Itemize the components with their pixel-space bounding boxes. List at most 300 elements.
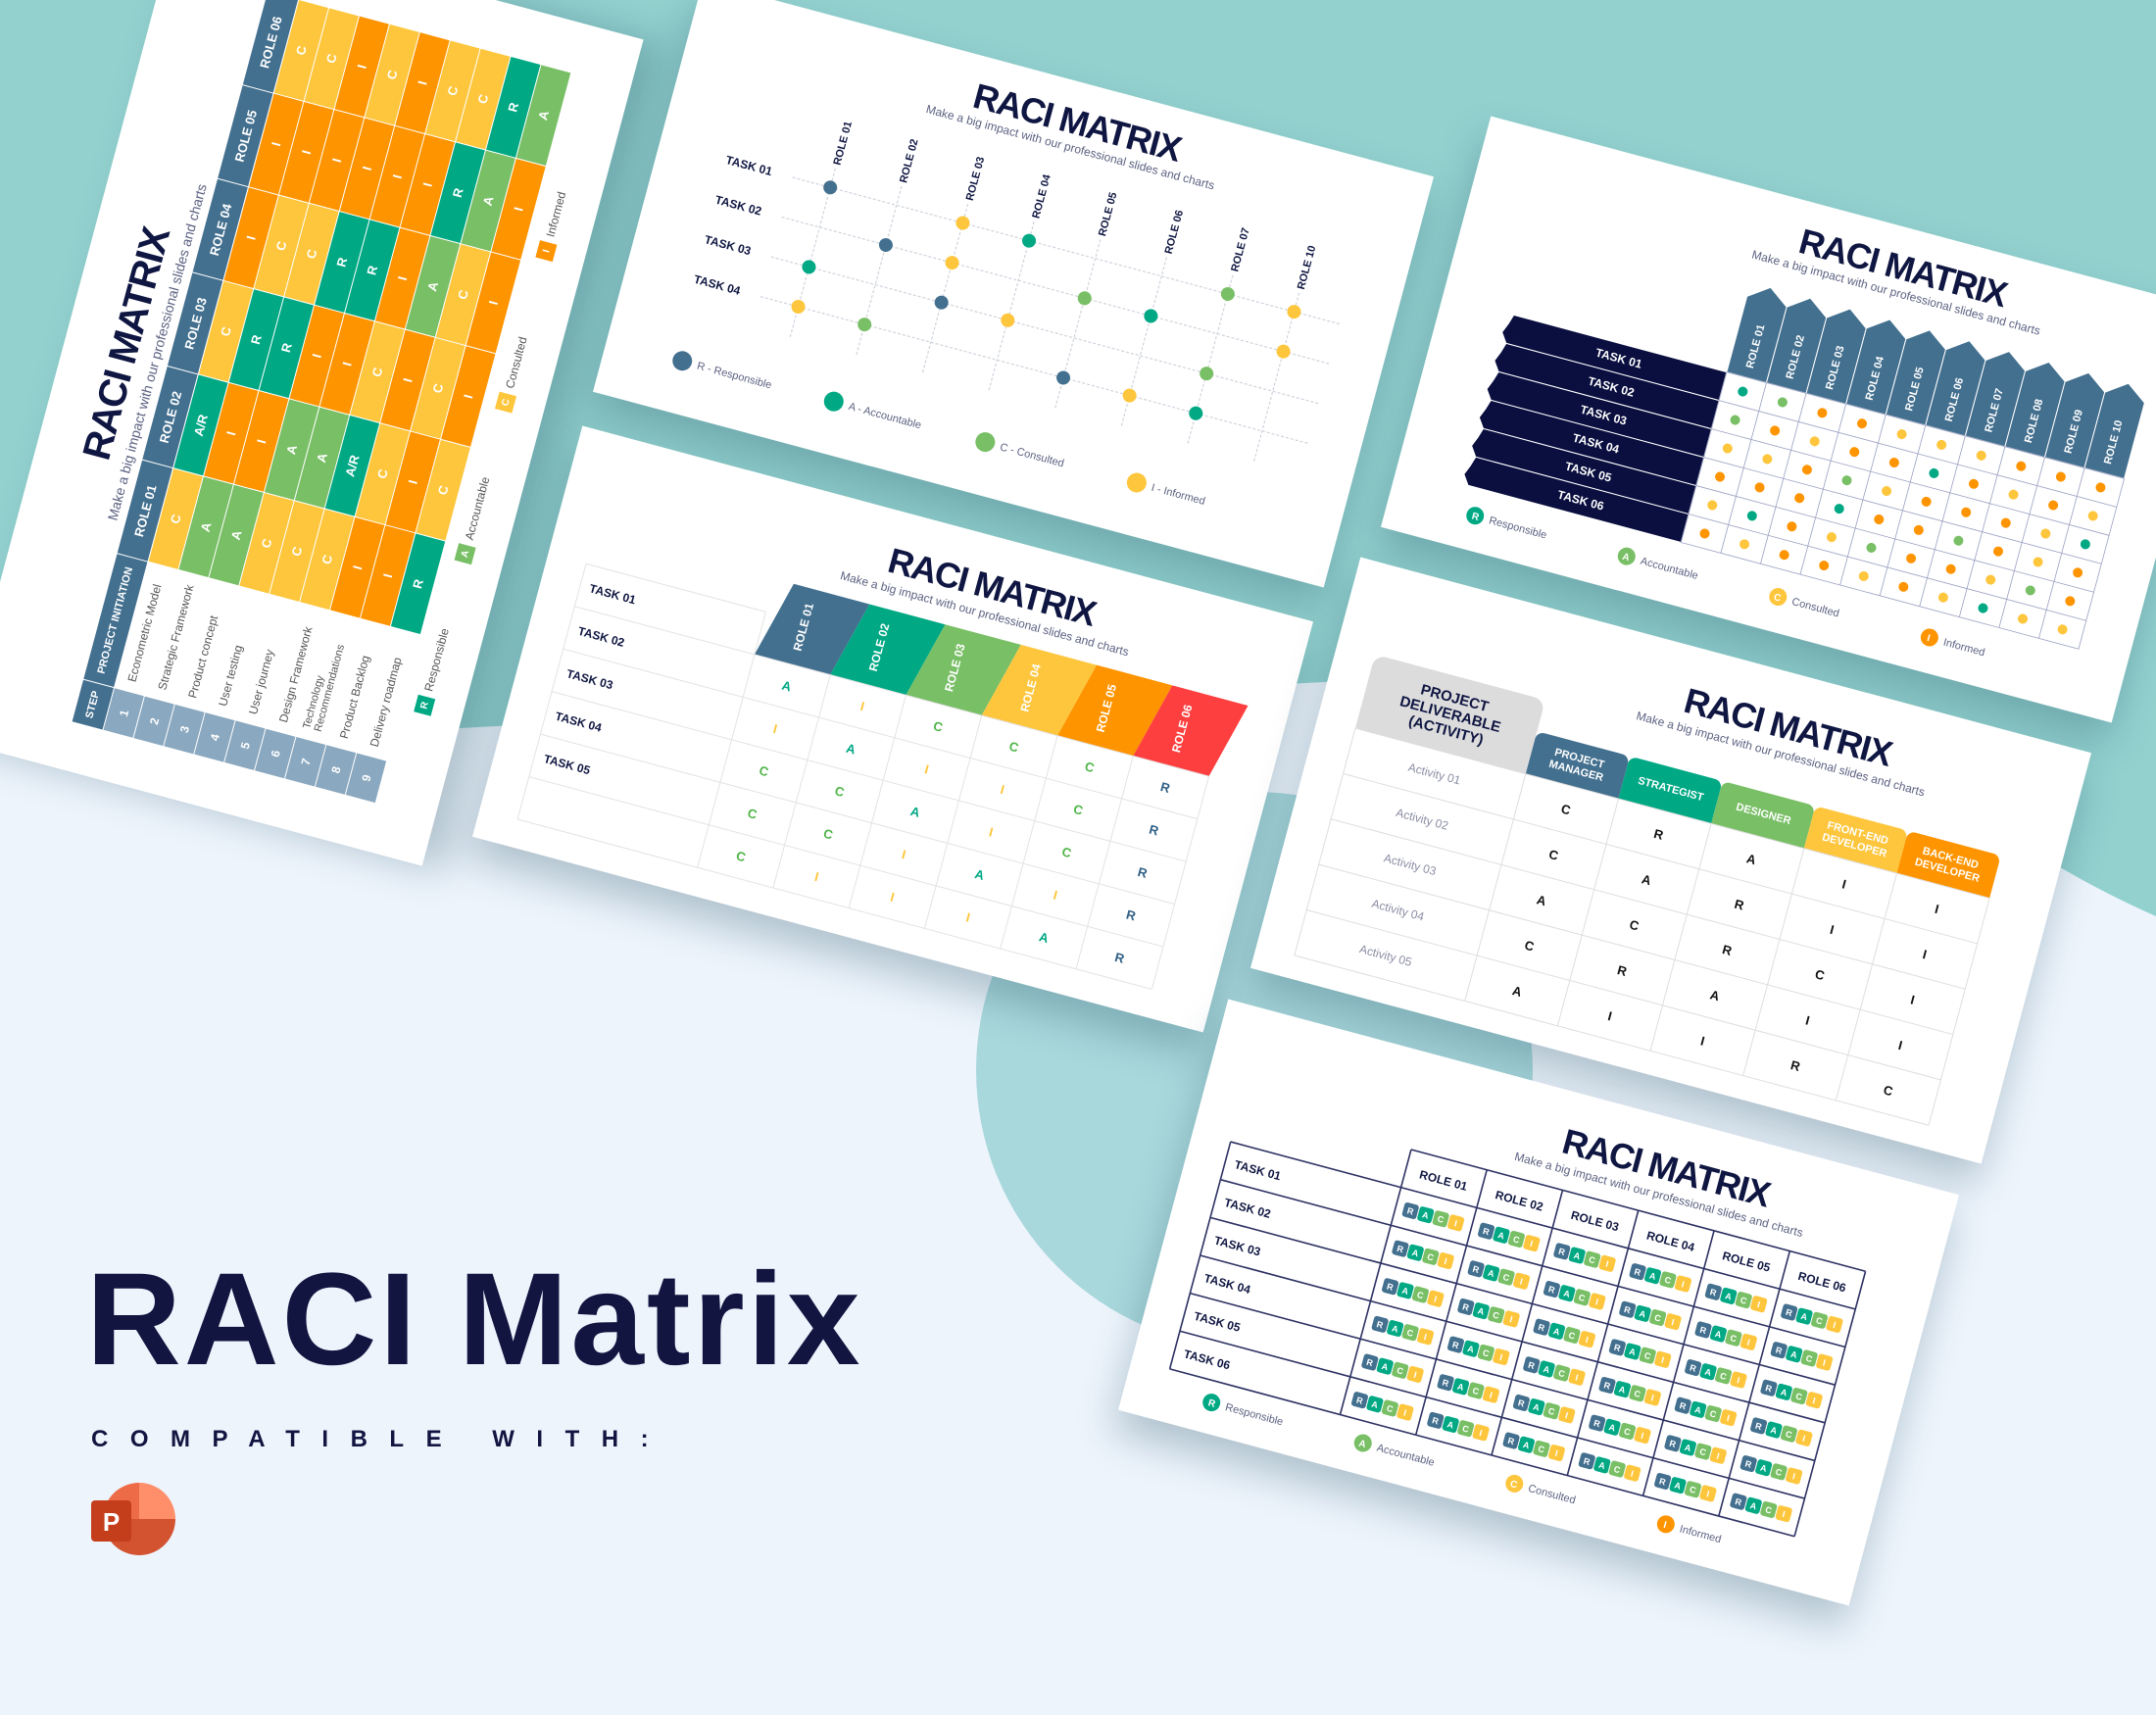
slide 6 title: RACI MATRIX (1558, 1121, 1774, 1214)
slide 6 table: C (1396, 1365, 1405, 1377)
slide 5 role headers: DEVELOPER (1821, 831, 1888, 859)
slide 6 table: R (1754, 1421, 1763, 1432)
slide 6 table: C (1698, 1446, 1708, 1457)
slide 2 dot chart: ROLE 04 (1030, 172, 1054, 220)
slide 6 table: C (1764, 1504, 1774, 1516)
slide 1 colored cells: R (450, 186, 466, 199)
slide 6 table: I (1585, 1335, 1590, 1345)
slide 6 table: R (1451, 1340, 1460, 1350)
slide 6 table: C (1386, 1403, 1395, 1414)
slide 6 table: A (1357, 1439, 1367, 1450)
slide 6 table: C (1502, 1272, 1511, 1283)
slide 5 grid: C (1559, 802, 1573, 818)
slide 5 grid: C (1628, 917, 1642, 934)
slide 1 colored cells: I (339, 361, 355, 368)
slide 6 table: R (1461, 1301, 1471, 1313)
slide 1 colored cells: I (406, 478, 420, 486)
slide 1 colored cells: A/R (342, 453, 363, 478)
slide 1 colored cells: R (248, 332, 265, 346)
slide 1 rows: 7 (298, 757, 313, 766)
slide 6 table: R (1355, 1395, 1364, 1406)
slide 6 table: C (1578, 1293, 1587, 1303)
slide 6 table: R (1482, 1226, 1491, 1237)
compatible with label: COMPATIBLE WITH: (91, 1426, 670, 1452)
slide 3 matrix: ROLE 02 (1785, 334, 1807, 380)
slide 6 table: R (1547, 1284, 1556, 1296)
slide 2 title: RACI MATRIX (969, 75, 1185, 170)
slide 1 table header: ROLE 02 (156, 389, 184, 445)
icon: PowerPoint: P (103, 1507, 120, 1537)
slide 4 table: R (1159, 779, 1172, 796)
slide 6 table: R (1775, 1345, 1784, 1356)
slide 1 colored cells: R (410, 577, 426, 590)
slide 6 table: A (1370, 1399, 1380, 1410)
slide 1 rows: Technology (301, 674, 326, 730)
slide 5: project deliverable table (1250, 557, 2091, 1164)
slide 5 grid: I (1896, 1038, 1904, 1053)
slide 4 table: I (999, 782, 1006, 797)
slide 6 table: A (1496, 1230, 1506, 1242)
slide 6 table: C (1663, 1275, 1673, 1286)
slide 4 table: R (1125, 906, 1138, 924)
slide 3 matrix: ROLE 04 (1864, 355, 1886, 402)
slide 3 matrix: TASK 04 (1571, 431, 1621, 457)
slide 5 grid: R (1616, 962, 1629, 979)
slide 6 table: A (1381, 1361, 1390, 1372)
slide 6 table: ROLE 05 (1721, 1249, 1772, 1275)
slide 6 table: A (1704, 1367, 1713, 1378)
slide 1 colored cells: I (390, 172, 405, 180)
slide 5 gray header: PROJECT (1419, 681, 1491, 715)
slide 5 gray header: (ACTIVITY) (1407, 712, 1486, 748)
slide 6 table: I (1489, 1390, 1494, 1400)
slide 6 table: I (1630, 1469, 1635, 1479)
slide 6 table: A (1673, 1480, 1683, 1492)
slide 1 colored cells: A (228, 528, 245, 542)
slide 5 grid: I (1699, 1033, 1706, 1049)
slide 6 table: A (1648, 1271, 1657, 1282)
slide 5 role headers: DEVELOPER (1914, 856, 1981, 884)
slide 6 table: I (1726, 1413, 1731, 1423)
slide 6 table: A (1639, 1308, 1647, 1320)
slide 6 table: C (1492, 1310, 1501, 1321)
slide 6 table: R (1709, 1287, 1718, 1298)
slide 6 table: I (1681, 1279, 1686, 1290)
slide 2 dot chart: C - Consulted (999, 441, 1065, 469)
slide 6 table: I (1498, 1352, 1503, 1362)
slide 1 colored cells: I (511, 206, 526, 213)
slide 6 table: A (1749, 1500, 1758, 1512)
slide 6 table: ROLE 01 (1418, 1167, 1469, 1194)
slide 5 role headers: BACK-END (1922, 845, 1980, 871)
slide 5 grid: Activity 01 (1406, 760, 1462, 787)
slide 6 table: R (1764, 1383, 1774, 1395)
slide 4 table: C (1060, 844, 1074, 860)
slide 4 table: C (1072, 802, 1085, 818)
slide 2 dot chart: TASK 04 (693, 272, 742, 298)
slide 1 colored cells: C (374, 467, 391, 480)
slide 1 legend: Consulted (503, 335, 530, 390)
slide 6 table: C (1623, 1426, 1632, 1438)
slide 6 table: A (1477, 1305, 1486, 1317)
slide 1 colored cells: A/R (191, 413, 211, 438)
slide 2 dot chart: A - Accountable (847, 401, 922, 431)
slide 6 table: R (1386, 1282, 1395, 1293)
slide 1 colored cells: C (455, 288, 471, 301)
slide 5 grid: A (1535, 892, 1548, 908)
slide 6 table: A (1789, 1349, 1799, 1360)
slide 1 colored cells: A (424, 279, 441, 293)
slide 5 grid: I (1829, 922, 1836, 937)
slide 4 table: TASK 01 (588, 581, 638, 607)
slide 1 colored cells: C (293, 43, 310, 57)
slide 6 table: I (1650, 1393, 1655, 1403)
slide 6 table: A (1456, 1382, 1465, 1393)
slide 6 table: R (1365, 1357, 1375, 1368)
slide 1 colored cells: I (461, 393, 475, 400)
slide 1 rows: 6 (268, 749, 282, 759)
slide 6 table: R (1785, 1307, 1793, 1318)
slide 2 dot chart: TASK 01 (724, 153, 774, 178)
slide 6 table: C (1775, 1467, 1784, 1478)
slide 4 table: A (1038, 929, 1051, 946)
slide 6 table: A (1466, 1344, 1476, 1355)
slide 5 grid: Activity 04 (1370, 897, 1426, 924)
slide 6 table: I (1453, 1218, 1458, 1229)
slide 4 table: C (833, 783, 847, 800)
slide 6 table: I (1444, 1256, 1448, 1266)
slide 6 table: C (1461, 1423, 1470, 1435)
slide 6 table: A (1608, 1422, 1617, 1434)
slide 1 colored cells: C (384, 68, 401, 81)
slide 5 grid: I (1921, 947, 1929, 962)
slide 6 table: C (1437, 1214, 1446, 1225)
slide 3 matrix: ROLE 07 (1983, 387, 2006, 433)
slide 1 colored cells: I (486, 299, 501, 307)
slide 6 table: I (1574, 1373, 1579, 1383)
slide 1 colored cells: A (198, 520, 215, 533)
slide 5 grid: I (1909, 992, 1916, 1007)
slide 1 colored cells: A (535, 109, 552, 122)
slide 3 matrix: ROLE 10 (2102, 419, 2126, 466)
slide 6 table (1168, 1141, 1866, 1545)
slide 5 grid: Activity 03 (1383, 851, 1438, 878)
slide 5 grid: R (1733, 897, 1746, 913)
slide 6 table: I (1705, 1489, 1710, 1499)
slide 5 gray header (1355, 655, 1545, 774)
slide 3 matrix: TASK 02 (1587, 374, 1637, 400)
slide 6 table: R (1658, 1476, 1667, 1488)
slide 6 table: A (1800, 1311, 1809, 1322)
slide 4 table: ROLE 04 (1017, 662, 1044, 713)
slide 1 legend (414, 190, 568, 716)
slide 3 matrix: ROLE 05 (1903, 366, 1927, 413)
slide 4 table: A (780, 678, 794, 695)
slide 6 table: I (1605, 1259, 1610, 1269)
slide 6 table: R (1689, 1362, 1697, 1374)
slide 1 rows: Product Backlog (337, 654, 372, 740)
slide 6 table: A (1487, 1268, 1495, 1279)
icon: PowerPoint (91, 1483, 175, 1555)
slide 6 table: I (1801, 1434, 1806, 1444)
slide 6 table: Consulted (1527, 1483, 1577, 1506)
slide 2 dot chart: ROLE 02 (898, 138, 921, 184)
slide 1 table header: ROLE 04 (206, 202, 234, 257)
slide 1 table header: ROLE 03 (181, 296, 209, 351)
slide 4 table: C (746, 806, 760, 822)
slide 1 legend: Accountable (463, 475, 492, 542)
slide 6 table: C (1785, 1429, 1793, 1440)
slide 6 table: A (1618, 1384, 1627, 1396)
slide 6 table: A (1421, 1209, 1430, 1221)
slide 5 grid: A (1745, 851, 1758, 867)
slide 1 colored cells: I (223, 429, 238, 437)
slide 1 colored cells: C (273, 239, 290, 252)
slide 6 table: C (1416, 1290, 1425, 1300)
slide 4 table: ROLE 02 (866, 621, 892, 673)
slide 4 table: C (735, 848, 748, 864)
slide 6 table: A (1780, 1387, 1788, 1398)
slide 1 colored cells: I (415, 79, 430, 86)
slide 6 table: I (1529, 1239, 1534, 1249)
slide 6 table: R (1744, 1458, 1753, 1470)
slide 1 rows (104, 583, 405, 804)
slide 3 matrix: C (1773, 592, 1782, 605)
slide 4 table: ROLE 06 (1169, 703, 1196, 754)
slide 4 table: I (813, 869, 820, 884)
slide 1 rows: Recommendations (313, 643, 347, 733)
slide 4 table: R (1136, 864, 1150, 881)
slide 1 rows: 5 (237, 741, 252, 751)
slide 6 table: I (1640, 1431, 1644, 1441)
slide 1 colored cells: I (243, 234, 259, 241)
slide 6 table: I (1670, 1317, 1675, 1327)
slide 1 colored cells: R (333, 255, 350, 269)
slide 2 dot chart: ROLE 07 (1229, 226, 1252, 273)
slide 1 legend: I (541, 248, 552, 254)
slide 1 colored cells: C (429, 381, 446, 395)
slide 1 colored cells: I (269, 140, 283, 148)
slide 1 colored cells: R (505, 100, 521, 114)
slide 6 table: ROLE 03 (1569, 1208, 1621, 1234)
slide 3 matrix: TASK 03 (1579, 403, 1629, 428)
slide 6 table: C (1805, 1353, 1814, 1364)
slide 1 rows: User testing (216, 644, 245, 708)
slide 5 grid: C (1523, 938, 1537, 955)
slide 6 table: C (1794, 1391, 1804, 1402)
slide 1 colored cells: I (299, 149, 314, 156)
slide 1 colored cells: I (254, 438, 269, 445)
slide 4 table: C (822, 826, 835, 843)
slide 1 colored cells: I (329, 157, 344, 164)
slide 4: colored role headers with letters (472, 425, 1313, 1033)
slide 5 grid: C (1813, 966, 1827, 983)
slide 3 matrix: ROLE 01 (1744, 323, 1767, 369)
slide 6 table: C (1613, 1464, 1622, 1475)
slide 1 table header: ROLE 06 (257, 15, 284, 70)
slide 6 table: C (1557, 1368, 1566, 1379)
slide 6 table: R (1517, 1397, 1526, 1409)
slide 4 table: TASK 03 (565, 666, 614, 692)
slide 1 colored cells: C (259, 536, 275, 550)
slide 6 table: I (1478, 1428, 1484, 1438)
slide 1 title: RACI MATRIX (75, 223, 178, 465)
slide 6 table: R (1734, 1496, 1743, 1507)
slide 6 table: R (1506, 1436, 1516, 1446)
slide 5 grid: R (1721, 942, 1734, 958)
slide 6 table: I (1433, 1294, 1438, 1304)
slide 1 rows: 4 (207, 732, 222, 742)
slide 4 table: I (771, 721, 779, 736)
slide 6 table: I (1519, 1277, 1524, 1287)
slide 6 table: ROLE 06 (1796, 1269, 1848, 1295)
slide 4 table: R (1113, 950, 1127, 966)
slide 6 table: I (1509, 1314, 1514, 1325)
slide 4 table: C (758, 762, 770, 780)
slide 3 matrix: I (1926, 633, 1932, 644)
slide 3 title: RACI MATRIX (1795, 220, 2011, 315)
slide 6 table: R (1396, 1244, 1405, 1254)
slide 5 grid: I (1606, 1008, 1613, 1024)
slide 2 dot chart (672, 121, 1340, 508)
slide 1 colored cells: I (360, 165, 374, 172)
slide 2 dot chart: ROLE 03 (964, 156, 987, 202)
slide 4 table: A (908, 804, 922, 820)
slide 6 table: TASK 05 (1193, 1309, 1242, 1335)
slide 1 rows: Strategic Framework (155, 583, 197, 692)
slide 4 table: I (1052, 887, 1059, 903)
slide 3 matrix: ROLE 09 (2063, 409, 2085, 455)
slide 3 matrix: ROLE 08 (2023, 398, 2045, 444)
slide 6 table: A (1522, 1440, 1531, 1450)
slide 6 table: C (1689, 1485, 1697, 1495)
slide 5 title: RACI MATRIX (1680, 680, 1895, 774)
slide 6 table: Accountable (1375, 1443, 1436, 1469)
slide 6 table: R (1557, 1247, 1567, 1257)
slide 1 legend: A (459, 549, 471, 559)
slide 3 subtitle: Make a big impact with our professional slides and charts (1750, 248, 2041, 338)
slide 4 table: C (932, 718, 945, 735)
slide 6 table: C (1509, 1479, 1518, 1492)
slide 3 matrix: ROLE 06 (1943, 376, 1966, 423)
slide 5 subtitle: Make a big impact with our professional slides and charts (1635, 709, 1927, 799)
slide 1 legend: R (418, 701, 430, 710)
slide 4 table: C (1007, 739, 1021, 756)
slide 5 role headers: PROJECT (1553, 746, 1605, 770)
slide 5 grid: C (1882, 1082, 1895, 1100)
slide 6 table: I (1554, 1448, 1559, 1458)
slide 6 table: A (1684, 1443, 1692, 1453)
slide 1 colored cells: C (444, 84, 462, 97)
slide 1 colored cells: I (310, 352, 324, 360)
slide 6 table: C (1740, 1295, 1748, 1306)
slide 6 table: I (1413, 1370, 1418, 1380)
slide 6 table: R (1206, 1397, 1217, 1410)
slide 6 table: R (1442, 1378, 1450, 1389)
slide 6 table: C (1643, 1350, 1652, 1361)
slide 1 rows: 8 (328, 764, 343, 775)
slide 6 table: A (1446, 1419, 1455, 1431)
slide 4 table: I (988, 824, 995, 840)
slide 6 table: Responsible (1224, 1401, 1284, 1428)
slide 1 table header: STEP (83, 690, 102, 720)
main heading: RACI Matrix (86, 1247, 862, 1393)
slide 6 subtitle: Make a big impact with our professional slides and charts (1513, 1150, 1804, 1240)
slide 3 matrix: R (1471, 512, 1481, 523)
slide 4 title: RACI MATRIX (884, 540, 1100, 634)
slide 6 table: I (1564, 1410, 1569, 1420)
slide 6 table: I (1791, 1471, 1796, 1482)
slide 2 dot chart: ROLE 06 (1163, 209, 1186, 256)
slide 1 colored cells: A (480, 194, 497, 207)
slide 1 rows: Design Framework (276, 625, 316, 724)
slide 6 table: A (1573, 1250, 1582, 1261)
slide 2 dot chart: ROLE 05 (1097, 191, 1119, 237)
slide 6 table: Informed (1679, 1523, 1723, 1545)
slide 2 dot chart: ROLE 10 (1296, 244, 1318, 291)
slide 6 table: R (1679, 1400, 1688, 1411)
slide 6 table: R (1613, 1343, 1622, 1353)
slide 1 rows: Delivery roadmap (368, 656, 405, 749)
slide 6 table: A (1724, 1291, 1734, 1302)
slide 1 colored cells: C (369, 366, 386, 378)
slide 6 table: C (1406, 1327, 1415, 1339)
slide 4 table: TASK 05 (542, 752, 592, 777)
slide 1 table header: ROLE 01 (131, 483, 159, 538)
slide 6 table: C (1719, 1371, 1728, 1382)
slide 6 table: ROLE 02 (1494, 1188, 1544, 1214)
slide 5 grid: R (1789, 1057, 1802, 1074)
slide 2 dot chart: ROLE 01 (832, 121, 855, 167)
slide 1 colored cells: I (395, 274, 410, 282)
slide 5 role headers (1526, 733, 1999, 898)
slide 6 table: C (1482, 1348, 1491, 1359)
slide 6 table: C (1567, 1330, 1577, 1342)
slide 1 colored cells: C (288, 545, 306, 558)
slide 6 table: C (1729, 1333, 1739, 1344)
slide 5 role headers: MANAGER (1547, 758, 1604, 784)
slide 1 colored cells: C (323, 52, 340, 65)
slide 6 table: R (1527, 1360, 1537, 1371)
slide 1 colored cells: C (318, 553, 335, 565)
slide 6 table: I (1832, 1320, 1837, 1330)
slide 3 matrix: Informed (1942, 637, 1986, 659)
slide 4 table: A (973, 866, 987, 883)
slide 4 table: TASK 04 (554, 710, 604, 735)
slide 5 grid: I (1934, 902, 1940, 916)
slide 1 legend: Informed (544, 190, 568, 238)
slide 6 table: I (1782, 1509, 1787, 1519)
slide 5 grid: I (1804, 1012, 1811, 1028)
slide 1 colored cells: C (474, 92, 491, 106)
slide 1 legend: C (500, 398, 512, 408)
slide 2 dot chart: I - Informed (1151, 482, 1206, 508)
slide 1 colored cells: C (168, 512, 184, 525)
slide 6 table: C (1537, 1444, 1546, 1455)
slide 6 table: C (1653, 1312, 1662, 1324)
slide 6 table: C (1709, 1408, 1718, 1420)
slide 1: vertical colored RACI table (0, 0, 644, 866)
slide 6 table: TASK 03 (1212, 1233, 1262, 1259)
slide 4 table (517, 563, 1249, 990)
slide 6 table: I (1756, 1299, 1761, 1309)
slide 1 colored cells: R (364, 264, 380, 276)
slide 1 table header (73, 0, 298, 729)
slide 6 table: A (1400, 1286, 1410, 1297)
slide 3 matrix: Consulted (1790, 596, 1840, 620)
slide 3: arrow headers with dots (1381, 116, 2156, 723)
slide 6 table: I (1594, 1297, 1599, 1307)
